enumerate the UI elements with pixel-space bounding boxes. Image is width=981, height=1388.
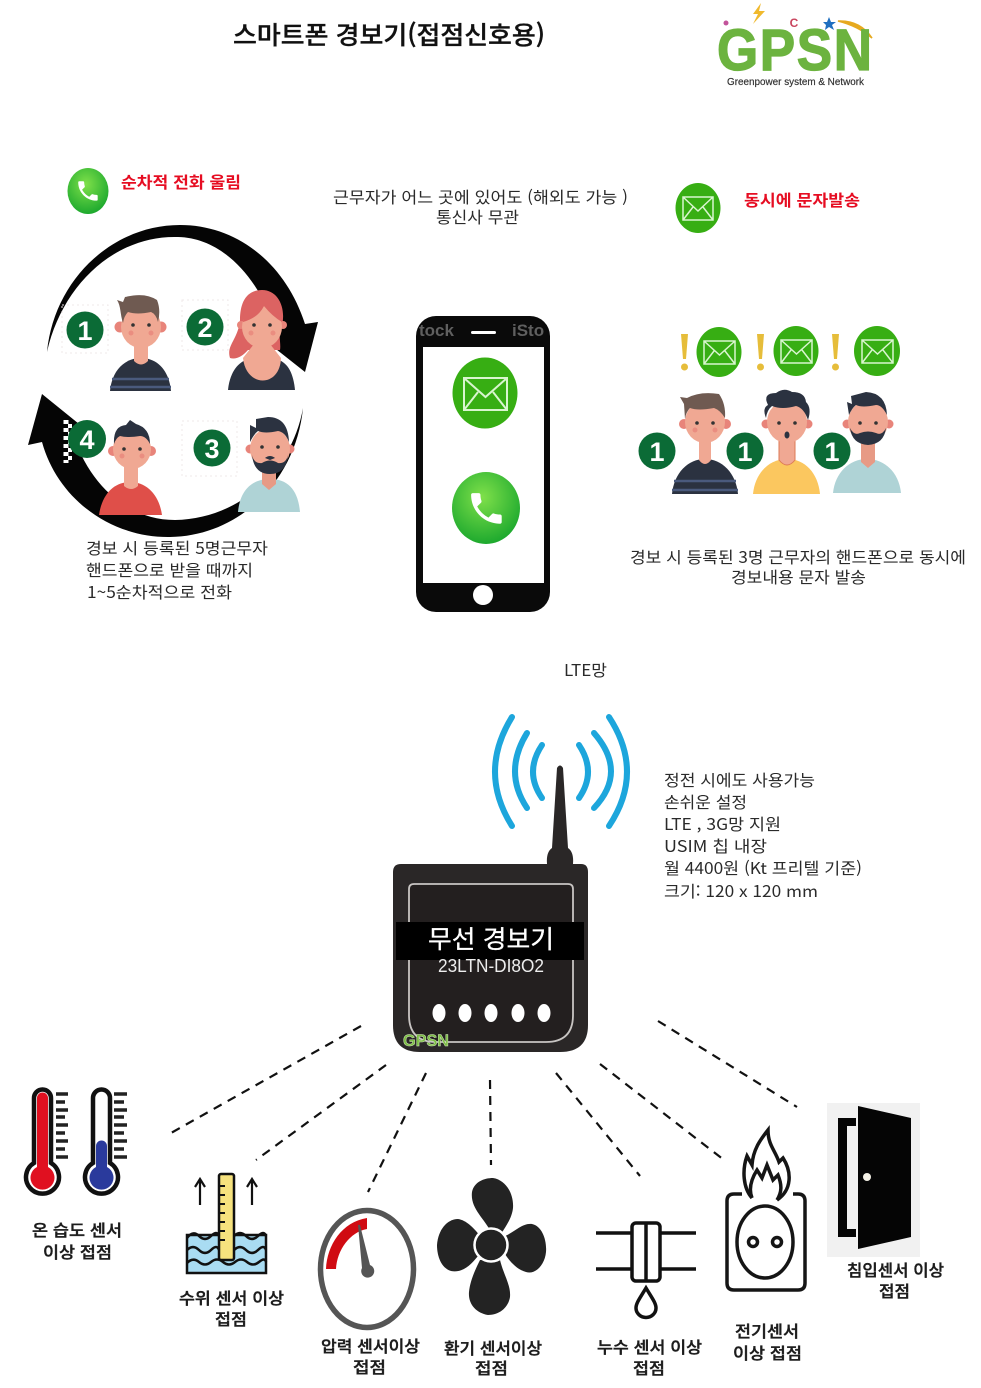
model number: 23LTN-DI8O2: [438, 956, 544, 976]
label: pressure: 접점: [353, 1354, 386, 1378]
label: leak: [597, 1334, 702, 1379]
exclamation 1: [681, 334, 688, 370]
wireless alarm device: [393, 766, 588, 1052]
icon: leak pipe: [596, 1223, 696, 1317]
exclamation 3: [832, 334, 839, 370]
badge 1: 1: [77, 316, 93, 346]
text: five-worker call description: [86, 535, 268, 603]
title: 스마트폰 경보기(접점신호용): [233, 16, 545, 52]
smartphone: tock: [419, 321, 454, 340]
worker 2: [753, 390, 820, 494]
badge 4: 4: [79, 425, 95, 455]
label: pressure: [321, 1333, 420, 1378]
badge middle: [726, 432, 764, 470]
icon: wireless signal waves: [495, 717, 627, 826]
heading: simultaneous SMS: 동시에 문자발송: [744, 187, 860, 211]
badge 4: [66, 420, 106, 463]
envelope 3: [854, 326, 900, 376]
label: intrusion: [847, 1257, 944, 1302]
device body: [393, 864, 588, 1052]
label: temperature humidity: 온 습도 센서: [32, 1217, 122, 1241]
icon: thermometers: [26, 1090, 127, 1194]
device features list: 크기: 120 x 120 mm: [664, 878, 818, 902]
text: five-worker call description: 경보 시 등록된 5명근무자: [86, 535, 268, 559]
label: water level: 접점: [215, 1306, 247, 1330]
device features list: USIM 칩 내장: [664, 833, 767, 857]
icon: green phone call: [68, 168, 108, 214]
device features list: [664, 767, 862, 902]
badge 2: [182, 300, 228, 350]
logo: GPSN: GPSN: [717, 18, 872, 83]
badge right: [814, 432, 850, 470]
worker 3: [833, 392, 901, 493]
badge 3: 3: [204, 434, 220, 464]
envelope 1: [696, 327, 742, 377]
device name: 무선 경보기: [428, 920, 554, 956]
label: water level: 수위 센서 이상: [179, 1285, 284, 1309]
label: ventilation: 환기 센서이상: [444, 1335, 542, 1359]
badge 3: [182, 421, 237, 476]
status lights: [432, 1004, 550, 1022]
label: leak: 접점: [633, 1355, 665, 1379]
text: three-worker SMS description: [630, 544, 966, 588]
label: temperature humidity: [32, 1217, 122, 1263]
device features list: LTE , 3G망 지원: [664, 811, 781, 835]
arrow: circular top: [47, 225, 318, 372]
badge left: 1: [649, 437, 665, 467]
mini logo: GPSN: [403, 1031, 449, 1050]
label: intrusion: 접점: [879, 1278, 910, 1302]
arrow: circular bottom: [28, 394, 303, 537]
icon: envelope on screen: [452, 358, 518, 428]
badge middle: 1: [737, 437, 753, 467]
icon: green envelope: [676, 183, 720, 233]
device banner: [396, 922, 584, 960]
heading: sequential phone ring: 순차적 전화 울림: [121, 169, 241, 193]
text: worker anywhere: 통신사 무관: [436, 204, 519, 228]
text: five-worker call description: 핸드폰으로 받을 때까지: [86, 557, 253, 581]
person 1: [110, 295, 171, 391]
badge 2: 2: [197, 313, 213, 343]
badge right: 1: [824, 437, 840, 467]
device features list: 월 4400원 (Kt 프리텔 기준): [664, 855, 862, 879]
label: LTE network: LTE망: [564, 657, 607, 681]
people call order: [62, 290, 300, 515]
device panel outline: [409, 884, 573, 1042]
label: temperature humidity: 이상 접점: [43, 1239, 112, 1263]
label: pressure: 압력 센서이상: [321, 1333, 420, 1357]
antenna: [547, 766, 573, 864]
person 3: [238, 417, 300, 512]
icon: pressure gauge: [320, 1210, 414, 1328]
icon: door: [827, 1103, 920, 1257]
icon: water level: [187, 1174, 266, 1273]
label: intrusion: 침입센서 이상: [847, 1257, 944, 1281]
text: three-worker SMS description: 경보내용 문자 발송: [731, 564, 866, 588]
text: five-worker call description: 1~5순차적으로 전화: [87, 579, 232, 603]
smartphone: [416, 316, 550, 612]
label: leak: 누수 센서 이상: [597, 1334, 702, 1358]
label: water level: [179, 1285, 284, 1330]
text: worker anywhere: 근무자가 어느 곳에 있어도 (해외도 가능 ): [333, 184, 628, 208]
dashed connector lines: [171, 1021, 797, 1192]
text: three-worker SMS description: 경보 시 등록된 3명 근무자의 핸드폰으로 동시에: [630, 544, 966, 568]
exclamation 2: [757, 334, 764, 370]
label: ventilation: 접점: [475, 1355, 508, 1379]
worker 1: [672, 393, 738, 494]
logo: GPSN: C: [790, 16, 799, 30]
device features list: 손쉬운 설정: [664, 789, 747, 813]
icon: outlet on fire: [727, 1130, 805, 1290]
badge left: [638, 432, 676, 470]
icon: phone on screen: [452, 472, 520, 544]
icon: ventilation fan: [437, 1178, 546, 1315]
logo: GPSN: Greenpower system & Network: [727, 76, 865, 88]
person 2: [228, 290, 295, 390]
badge 1: [62, 305, 108, 353]
person 4: [99, 420, 162, 515]
label: electric: 이상 접점: [733, 1340, 802, 1364]
device features list: 정전 시에도 사용가능: [664, 767, 815, 791]
text: worker anywhere: [333, 184, 628, 228]
label: ventilation: [444, 1335, 542, 1379]
envelope 2: [774, 326, 818, 376]
envelopes with exclamation marks: [681, 326, 900, 377]
label: electric: 전기센서: [735, 1318, 799, 1342]
three workers: [638, 390, 901, 494]
label: electric: [733, 1318, 802, 1364]
smartphone: iSto: [512, 321, 544, 340]
